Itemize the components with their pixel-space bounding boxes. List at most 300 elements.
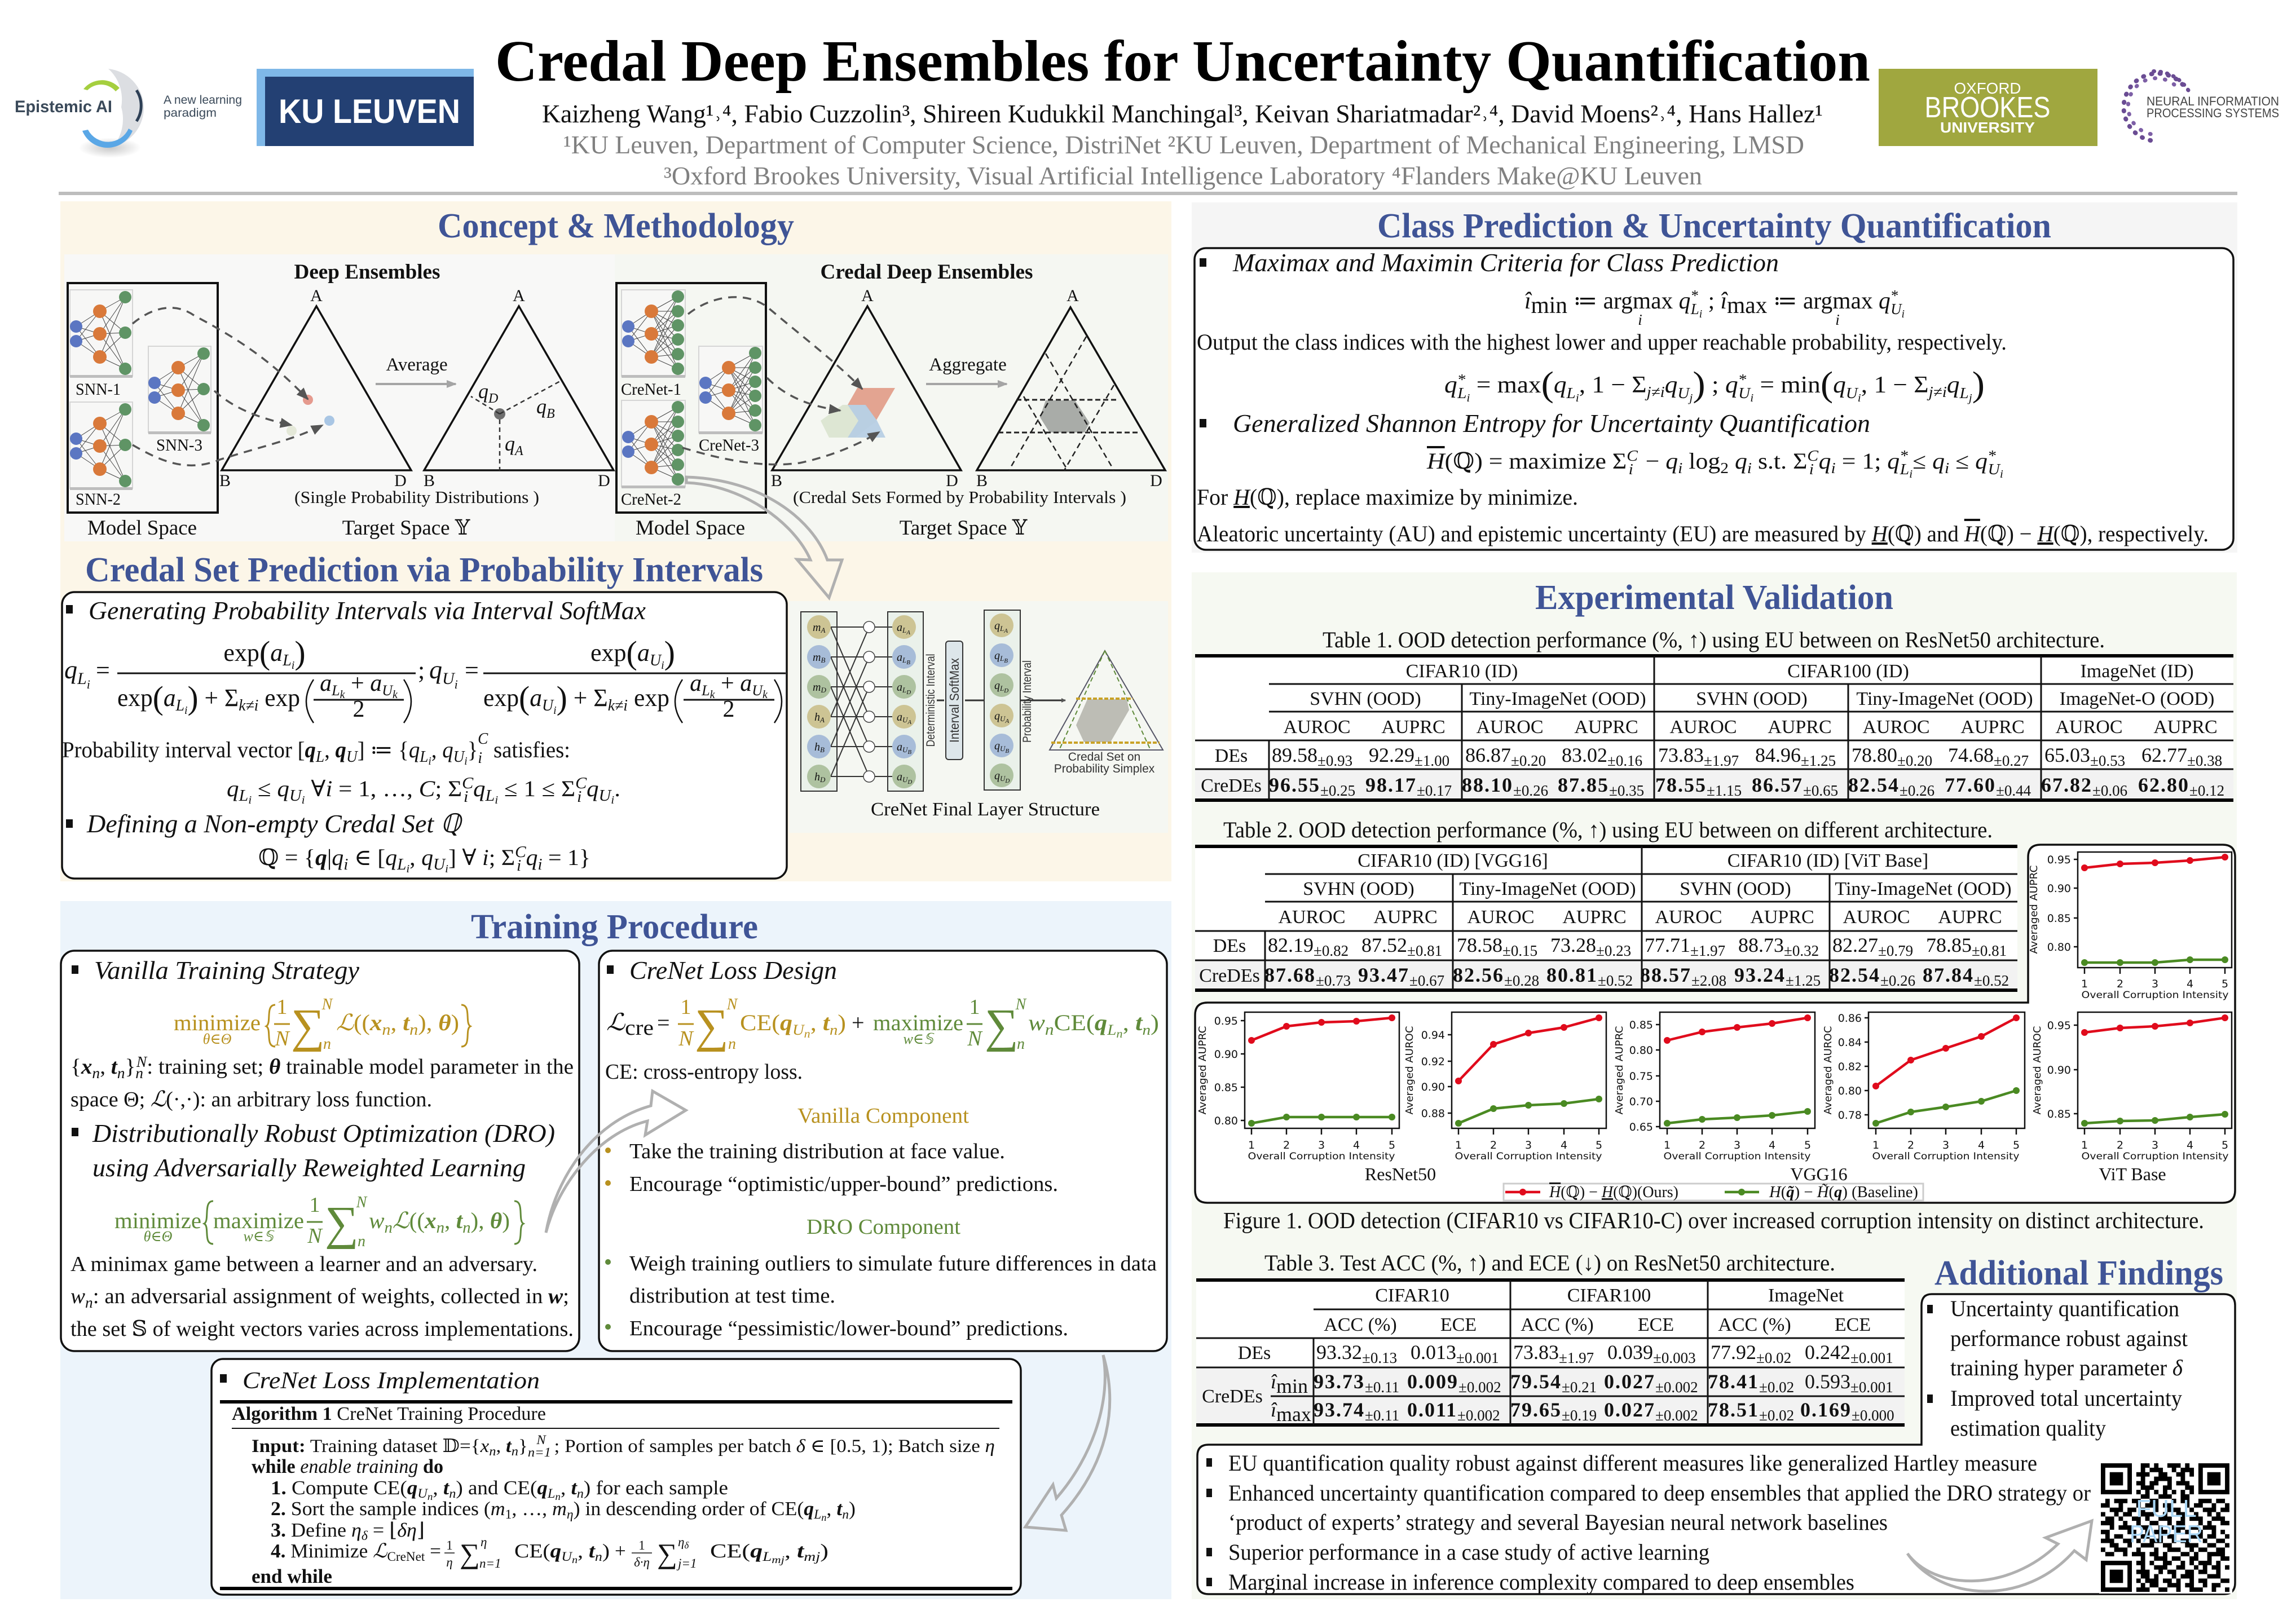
formula: argmax decision rules: i [1638, 311, 1642, 328]
text: probability interval vector: i [478, 749, 482, 767]
box: CreNet loss design: Take the training distribution at face value. [629, 1140, 1005, 1163]
algorithm steps: } [518, 1436, 528, 1457]
formula: argmax decision rules: ≔ argmax [1767, 288, 1879, 314]
figure: CreNet final layer structure: A [906, 629, 910, 636]
chart: ViT Base AUROC: 4 [2187, 1139, 2193, 1151]
chart: ResNet50 AUROC: 1 [1455, 1139, 1462, 1151]
text box: probability intervals formulas [62, 592, 787, 879]
table 3: ECE [1638, 1314, 1674, 1335]
subheading: vanilla component: Vanilla Component [797, 1104, 969, 1128]
formula: interval constraint: U [598, 787, 612, 805]
figure: CreNet final layer structure: U [1000, 774, 1006, 783]
chart: ViT Base AUROC: Averaged AUROC [2031, 1026, 2043, 1114]
chart: ResNet50 AUPRC: 0.95 [1214, 1015, 1238, 1027]
table 2: AUROC [1467, 907, 1535, 928]
algorithm steps: 2. Sort the sample indices (m [271, 1498, 505, 1520]
box: vanilla training and DRO: n [85, 1294, 93, 1311]
chart: ResNet50 AUPRC: 3 [1318, 1139, 1325, 1151]
table 1: CIFAR10 (ID) [1406, 661, 1518, 682]
text: probability interval vector: ] ≔ { [358, 737, 409, 762]
formula: interval softmax: exp [117, 684, 153, 712]
chart: ViT Base AUPRC: Overall Corruption Intensity [2081, 990, 2229, 1001]
text box: additional findings: Uncertainty quantification [1950, 1296, 2179, 1321]
formula: interval constraint: i [495, 794, 498, 806]
formula: interval constraint: i [577, 788, 581, 806]
table 2: AUPRC [1562, 907, 1627, 928]
formula: DRO objective: w∈𝕊 [243, 1228, 275, 1245]
algorithm steps: end while [252, 1565, 332, 1587]
formula: CreNet loss [606, 995, 1159, 1053]
chart: VGG16 AUPRC: 2 [1699, 1139, 1706, 1151]
algorithm steps: ) [602, 1540, 610, 1562]
formula: interval constraint: i [302, 794, 305, 806]
formula: argmax decision rules: * [1890, 287, 1898, 304]
table 3: 93.73 [1314, 1370, 1365, 1393]
algorithm steps: t [571, 1477, 578, 1499]
logo: Neural Information Processing Systems: PROCESSING SYSTEMS [2147, 106, 2279, 120]
formula: interval softmax: k≠i [608, 697, 628, 714]
formula: DRO objective: minimize [114, 1208, 201, 1233]
formula: credal set: ] ∀ [448, 845, 482, 870]
formula: interval softmax: exp [628, 684, 669, 712]
logo: Epistemic AI: A new learning [164, 94, 242, 107]
table 2: 93.47 [1358, 964, 1409, 986]
table 2: 73.28 [1550, 934, 1596, 956]
formula: DRO objective: θ∈Θ [144, 1228, 173, 1245]
figure: credal deep ensembles: CreNet-1 [621, 380, 681, 399]
algorithm steps: = ⌊ [368, 1519, 397, 1541]
panel: class prediction and uncertainty quantification [1192, 202, 2237, 553]
algorithm steps: 1 [638, 1538, 645, 1552]
formula: vanilla objective: θ) [438, 1010, 459, 1035]
table 2: ±0.52 [1598, 972, 1633, 989]
algorithm steps: q [804, 1498, 814, 1520]
chart legend [1504, 1184, 1923, 1201]
chart: ResNet50 AUPRC: 0.80 [1214, 1115, 1238, 1127]
table 3: ±0.003 [1653, 1349, 1696, 1366]
algorithm steps: δη⌋ [397, 1519, 425, 1541]
formula: vanilla objective: n [409, 1021, 418, 1039]
chart legend: H(ℚ) − H(ℚ)(Ours) [1549, 1184, 1678, 1201]
box: CreNet loss design: Encourage “optimistic/upper-bound” predictions. [629, 1172, 1058, 1196]
formula: generalized entropy: i [1747, 460, 1752, 476]
chart: ResNet50 AUROC: 5 [1596, 1139, 1602, 1151]
formula: reachable probabilities: i [1750, 392, 1753, 404]
formula: interval softmax: + [715, 670, 740, 696]
figure: CreNet final layer structure: Interval SoftMax [947, 658, 962, 743]
table 2: 77.71 [1645, 934, 1690, 956]
table 1: SVHN (OOD) [1696, 689, 1808, 709]
formula: interval constraint: i = 1, …, C; Σ [325, 776, 460, 801]
formula: generalized entropy: s.t. Σ [1752, 448, 1807, 474]
text: lower entropy note: For H(ℚ), replace maximize by minimize. [1197, 484, 1578, 510]
figure 1 caption: Figure 1. OOD detection (CIFAR10 vs CIFAR10-C) over increased corruption intensity on distinct architecture. [1223, 1207, 2204, 1233]
algorithm steps: n=1 [479, 1556, 501, 1570]
formula: argmax decision rules: U [1890, 301, 1902, 317]
table 1: ±0.27 [1994, 752, 2029, 769]
text: training set description: θ trainable model parameter in the [269, 1055, 568, 1079]
table 2: AUPRC [1373, 907, 1438, 928]
table 1: ±1.00 [1414, 752, 1449, 769]
algorithm steps [252, 1433, 995, 1587]
table 2: ±0.52 [1974, 972, 2009, 989]
formula: generalized entropy: q [1887, 448, 1900, 474]
figure frame with charts [1195, 845, 2235, 1203]
algorithm steps: , [826, 1498, 836, 1520]
formula: interval softmax: U [442, 669, 456, 688]
arrow: to QR code [1907, 1521, 2092, 1591]
formula: CreNet loss: N [678, 1027, 694, 1051]
chart: ResNet50 AUROC: 0.94 [1421, 1029, 1445, 1042]
formula: CreNet loss: w∈𝕊 [903, 1031, 935, 1047]
formula: vanilla objective: θ∈Θ [203, 1031, 232, 1047]
chart: VGG16 AUROC: 0.86 [1838, 1012, 1862, 1025]
formula: CreNet loss: n [1045, 1021, 1054, 1039]
formula: CreNet loss: w [1028, 1010, 1045, 1035]
box: CreNet loss design [599, 951, 1167, 1351]
formula: vanilla objective: ℒ((x [336, 1010, 381, 1035]
chart: ViT Base AUROC: 0.95 [2047, 1020, 2071, 1032]
table 1: ImageNet (ID) [2080, 661, 2194, 682]
formula: CreNet loss: + [852, 1010, 865, 1035]
formula: interval constraint: ≤ [252, 776, 277, 801]
figure: deep ensembles: Average [386, 355, 448, 375]
formula: interval softmax: i [292, 659, 294, 672]
box: CreNet loss design: Weigh training outliers to simulate future differences in data [629, 1252, 1157, 1276]
figure: CreNet final layer structure: D [819, 775, 826, 784]
figure: deep ensembles: Deep Ensembles [294, 261, 440, 284]
figure: CreNet final layer structure: D [1003, 687, 1008, 694]
table 1: 62.77 [2141, 744, 2187, 766]
algorithm steps: n [489, 1444, 496, 1458]
formula: DRO objective: 1 [309, 1193, 320, 1217]
algorithm steps: t [836, 1498, 843, 1520]
formula: interval constraint: ≤ 1 ≤ Σ [498, 776, 575, 801]
formula: reachable probabilities: q [1444, 372, 1457, 398]
formula: generalized entropy: C [1807, 447, 1819, 464]
table 1: ±0.12 [2189, 782, 2224, 799]
algorithm steps: δ [362, 1529, 368, 1543]
figure: credal deep ensembles [616, 261, 1165, 540]
formula: credal set: i [445, 863, 448, 875]
table 1: ±1.25 [1801, 752, 1836, 769]
figure: deep ensembles: SNN-3 [156, 436, 202, 454]
figure: credal deep ensembles: Model Space [636, 517, 745, 540]
chart: VGG16 AUPRC: 0.75 [1629, 1070, 1653, 1083]
box: vanilla training and DRO: : an adversarial assignment of weights, collected in [93, 1285, 548, 1308]
algorithm steps: ) [849, 1498, 856, 1520]
formula: CreNet loss: N [726, 996, 738, 1013]
table 1: ±0.17 [1417, 782, 1452, 799]
formula: reachable probabilities: L [1566, 385, 1576, 401]
chart: ResNet50 AUROC: 4 [1561, 1139, 1567, 1151]
table 1: AUPRC [1381, 717, 1446, 738]
formula: interval softmax: ) [557, 679, 567, 716]
figure: CreNet final layer structure: h [814, 741, 820, 753]
formula: generalized entropy: i [1809, 461, 1814, 478]
table 2: ±0.26 [1880, 972, 1915, 989]
chart: ResNet50 AUPRC: Averaged AUPRC [1197, 1026, 1209, 1114]
formula: interval softmax: L [77, 669, 87, 688]
algorithm steps: n [821, 1512, 826, 1523]
formula: interval softmax: ) [188, 679, 199, 716]
algorithm steps: , [561, 1477, 571, 1499]
formula: interval softmax: i [661, 659, 664, 672]
table 1: 96.55 [1269, 774, 1320, 796]
box: vanilla training and DRO: the set 𝕊 of weight vectors varies across implementations. [70, 1317, 574, 1341]
heading: experimental validation: Experimental Validation [1535, 579, 1893, 617]
logo: Epistemic AI: Epistemic AI [15, 98, 112, 116]
formula: interval softmax [64, 634, 786, 723]
formula: interval softmax: + Σ [199, 684, 239, 712]
formula: credal set: i [343, 856, 348, 873]
box: vanilla training and DRO: Vanilla Training Strategy [94, 956, 360, 985]
formula: CreNet loss: = [657, 1010, 670, 1035]
figure: deep ensembles: B [424, 471, 435, 490]
figure: credal deep ensembles: D [946, 471, 958, 490]
text: probability interval vector: , [431, 737, 442, 762]
figure: CreNet final layer structure: a [897, 681, 902, 694]
formula: reachable probabilities: j [1687, 392, 1693, 404]
figure: CreNet final layer structure: U [902, 745, 909, 754]
formula: interval constraint: i [464, 788, 468, 806]
chart: VGG16 AUPRC: 3 [1734, 1139, 1740, 1151]
figure: CreNet final layer structure: a [897, 651, 902, 664]
table 3: 0.242 [1805, 1341, 1850, 1363]
formula: DRO objective: ((x [409, 1208, 436, 1233]
text: probability interval vector: C [478, 730, 488, 748]
formula: DRO objective: θ) [490, 1208, 510, 1233]
logo: Neural Information Processing Systems: NEURAL INFORMATION [2147, 94, 2279, 108]
formula: reachable probabilities: L [1959, 385, 1969, 401]
chart: ViT Base AUPRC: 4 [2187, 978, 2193, 990]
figure: credal deep ensembles: CreNet-2 [621, 490, 681, 509]
chart: ViT Base AUROC: 5 [2222, 1139, 2228, 1151]
formula: CreNet loss: cre [625, 1016, 654, 1040]
text box: additional findings: Improved total uncertainty [1950, 1385, 2182, 1411]
figure: CreNet final layer structure: L [999, 654, 1004, 663]
formula: interval softmax: L [701, 682, 710, 699]
table 3: 0.027 [1604, 1370, 1655, 1393]
table 2: 88.73 [1738, 934, 1784, 956]
table 3 [1196, 1280, 1905, 1426]
formula: DRO objective: w [369, 1208, 385, 1233]
table 2 [1195, 846, 2017, 990]
figure: CreNet final layer structure: A [907, 719, 911, 726]
table 1: ±0.35 [1609, 782, 1644, 799]
table 1: AUROC [1669, 717, 1737, 738]
formula: credal set: i [537, 856, 543, 873]
table 1: 87.85 [1558, 774, 1609, 796]
QR code: full paper [2099, 1460, 2232, 1594]
chart: ViT Base AUPRC: 0.85 [2047, 912, 2071, 925]
affiliations line 1: ¹KU Leuven, Department of Computer Science, DistriNet ²KU Leuven, Department of Mechanical Engineering, LMSD [563, 130, 1804, 159]
formula: DRO objective: N [356, 1194, 368, 1211]
algorithm steps: δ [684, 1540, 689, 1551]
figure: CreNet final layer structure: L [902, 626, 906, 634]
table 3: ±0.13 [1362, 1349, 1397, 1366]
chart: ResNet50 AUPRC: 2 [1283, 1139, 1290, 1151]
formula: credal set: U [433, 856, 446, 873]
table 1: 74.68 [1948, 744, 1994, 766]
formula: interval softmax: i [87, 677, 90, 691]
chart: VGG16 AUROC: Overall Corruption Intensity [1872, 1151, 2019, 1162]
figure: CreNet final layer structure: CreNet Final Layer Structure [871, 799, 1100, 820]
formula: credal set: i [517, 857, 521, 875]
chart: VGG16 AUROC [1822, 1012, 2025, 1162]
formula: reachable probabilities: * [1457, 371, 1466, 388]
logo: Epistemic AI: paradigm [164, 107, 217, 120]
figure: CreNet final layer structure: h [814, 711, 820, 723]
algorithm steps: m [552, 1498, 567, 1520]
chart: ViT Base AUROC [2031, 1012, 2232, 1162]
table 2: CreDEs [1199, 965, 1260, 986]
chart: VGG16 AUROC: 1 [1872, 1139, 1879, 1151]
table 2: ±0.67 [1409, 972, 1444, 989]
figure: CreNet final layer structure: D [820, 686, 826, 694]
text: training set description: n [117, 1065, 125, 1082]
table 2: ±0.23 [1596, 942, 1631, 959]
formula: interval softmax: 2 [723, 696, 734, 722]
chart: VGG16 AUROC: 3 [1942, 1139, 1949, 1151]
table 2: ±0.82 [1314, 942, 1348, 959]
QR code: full paper: PAPER [2130, 1520, 2203, 1548]
formula: reachable probabilities: ) [1972, 365, 1985, 404]
text: probability interval vector: L [315, 748, 324, 766]
algorithm steps: , …, [512, 1498, 552, 1520]
table 2: 93.24 [1734, 964, 1786, 986]
table 1: DEs [1215, 745, 1248, 766]
formula: generalized entropy: i [1831, 460, 1836, 476]
formula: credal set: i [406, 863, 409, 875]
figure: CreNet final layer structure: q [994, 620, 1000, 632]
algorithm steps: U [561, 1550, 573, 1564]
formula: interval softmax: + [345, 670, 370, 696]
formula: argmax decision rules: ≔ argmax [1567, 288, 1679, 314]
formula: DRO objective: ), [471, 1208, 490, 1233]
table 1: ImageNet-O (OOD) [2060, 689, 2214, 709]
formula: reachable probabilities: U [1677, 385, 1690, 401]
figure: CreNet final layer structure [789, 601, 1168, 833]
table 1: AUROC [1283, 717, 1351, 738]
formula: vanilla objective: ), [418, 1010, 438, 1035]
table 1: AUPRC [1768, 717, 1832, 738]
chart: VGG16 AUROC: 4 [1978, 1139, 1985, 1151]
chart: ResNet50 AUROC: Overall Corruption Intensity [1455, 1151, 1602, 1162]
table 3: 79.65 [1510, 1398, 1562, 1421]
figure: CreNet final layer structure: a [897, 711, 902, 723]
table 3: DEs [1238, 1343, 1271, 1363]
formula: reachable probabilities: ; [1706, 372, 1725, 398]
table 1: 82.54 [1848, 774, 1900, 796]
formula: reachable probabilities: i [1576, 392, 1579, 404]
figure: CreNet final layer structure: q [994, 650, 1000, 662]
figure: CreNet final layer structure: Probability Simplex [1054, 762, 1155, 775]
text: probability interval vector: q [442, 737, 453, 762]
formula: interval softmax: ( [519, 679, 530, 716]
formula: interval softmax: exp [483, 684, 519, 712]
formula: generalized entropy: log [1682, 448, 1720, 474]
figure: credal deep ensembles: (Credal Sets Formed by Probability Intervals ) [793, 487, 1126, 507]
algorithm steps: 1 [446, 1538, 453, 1552]
formula: interval softmax: U [382, 682, 394, 699]
formula: credal set: i; Σ [482, 845, 514, 870]
formula: interval softmax: a [740, 670, 752, 696]
text: training set description: : training set; [147, 1055, 269, 1079]
logo: Oxford Brookes University: OXFORD [1954, 80, 2021, 97]
table 2: ±0.81 [1972, 942, 2007, 959]
table 2: ±0.15 [1502, 942, 1537, 959]
chart: VGG16 AUROC: 5 [2013, 1139, 2020, 1151]
formula: interval constraint: q [227, 776, 239, 801]
box: vanilla training and DRO: Distributionally Robust Optimization (DRO) [92, 1119, 555, 1148]
chart: ResNet50 AUROC [1404, 1012, 1606, 1162]
formula: interval softmax: i [553, 704, 557, 717]
table 1: AUPRC [1960, 717, 2025, 738]
chart: VGG16 AUROC: 0.80 [1838, 1085, 1862, 1097]
figure: CreNet final layer structure: L [999, 624, 1004, 633]
figure: CreNet final layer structure: q [994, 710, 1000, 722]
formula: vanilla objective: minimize [174, 1010, 261, 1035]
formula: reachable probabilities: ( [1821, 365, 1833, 404]
table 3: ±0.002 [1655, 1407, 1698, 1424]
formula: credal set: q [421, 845, 433, 870]
formula: interval softmax: i [184, 704, 188, 717]
formula: CreNet loss: n [1116, 1028, 1123, 1040]
text: training set description: {x [70, 1055, 92, 1079]
formula: argmax decision rules: ; [1702, 288, 1720, 314]
algorithm steps: + [615, 1540, 626, 1562]
table 2: SVHN (OOD) [1680, 879, 1791, 899]
algorithm steps: δ·η [634, 1555, 650, 1569]
table 3: ImageNet [1768, 1285, 1844, 1306]
figure: deep ensembles: SNN-1 [76, 380, 121, 399]
algorithm steps: t [589, 1540, 596, 1562]
table 1: 67.82 [2041, 774, 2092, 796]
chart: VGG16 AUROC: Averaged AUROC [1822, 1026, 1834, 1114]
formula: reachable probabilities: i [1858, 392, 1861, 404]
chart: ResNet50 AUPRC: 0.90 [1214, 1048, 1238, 1061]
formula: generalized entropy: i [1945, 460, 1949, 476]
text box: additional findings [1197, 1294, 2235, 1595]
algorithm steps: n [595, 1550, 602, 1564]
formula: reachable probabilities: q [1554, 372, 1567, 398]
heading: class prediction: Class Prediction & Uncertainty Quantification [1377, 207, 2051, 245]
formula: CreNet loss: CE( [1054, 1010, 1095, 1035]
table 2: CIFAR10 (ID) [VGG16] [1358, 850, 1548, 871]
formula: credal set: C [515, 844, 526, 861]
formula: reachable probabilities: q [1725, 372, 1738, 398]
table 1: ±0.20 [1511, 752, 1546, 769]
figure: credal deep ensembles: Credal Deep Ensembles [820, 261, 1033, 284]
formula: interval softmax: k [710, 689, 716, 701]
algorithm steps: mj [804, 1550, 820, 1564]
table 3: 0.039 [1607, 1341, 1653, 1363]
text box: additional findings: ‘product of experts’ strategy and several Bayesian neural network baselines [1228, 1510, 1888, 1535]
table 2: Tiny-ImageNet (OOD) [1459, 879, 1636, 899]
logo: Oxford Brookes University: BROOKES [1924, 91, 2051, 124]
algorithm steps: η [567, 1507, 574, 1521]
table 3: ECE [1440, 1314, 1477, 1335]
figure: CreNet final layer structure: a [897, 741, 902, 753]
algorithm steps: ) [820, 1540, 829, 1562]
figure: CreNet final layer structure: q [994, 740, 1000, 752]
table 1: ±1.15 [1707, 782, 1742, 799]
formula: reachable probabilities: i [1466, 392, 1470, 404]
figure: CreNet final layer structure: D [906, 689, 911, 696]
box: CreNet loss implementation: CreNet Loss Implementation [243, 1368, 540, 1394]
text box: class prediction formulas [1195, 248, 2233, 550]
